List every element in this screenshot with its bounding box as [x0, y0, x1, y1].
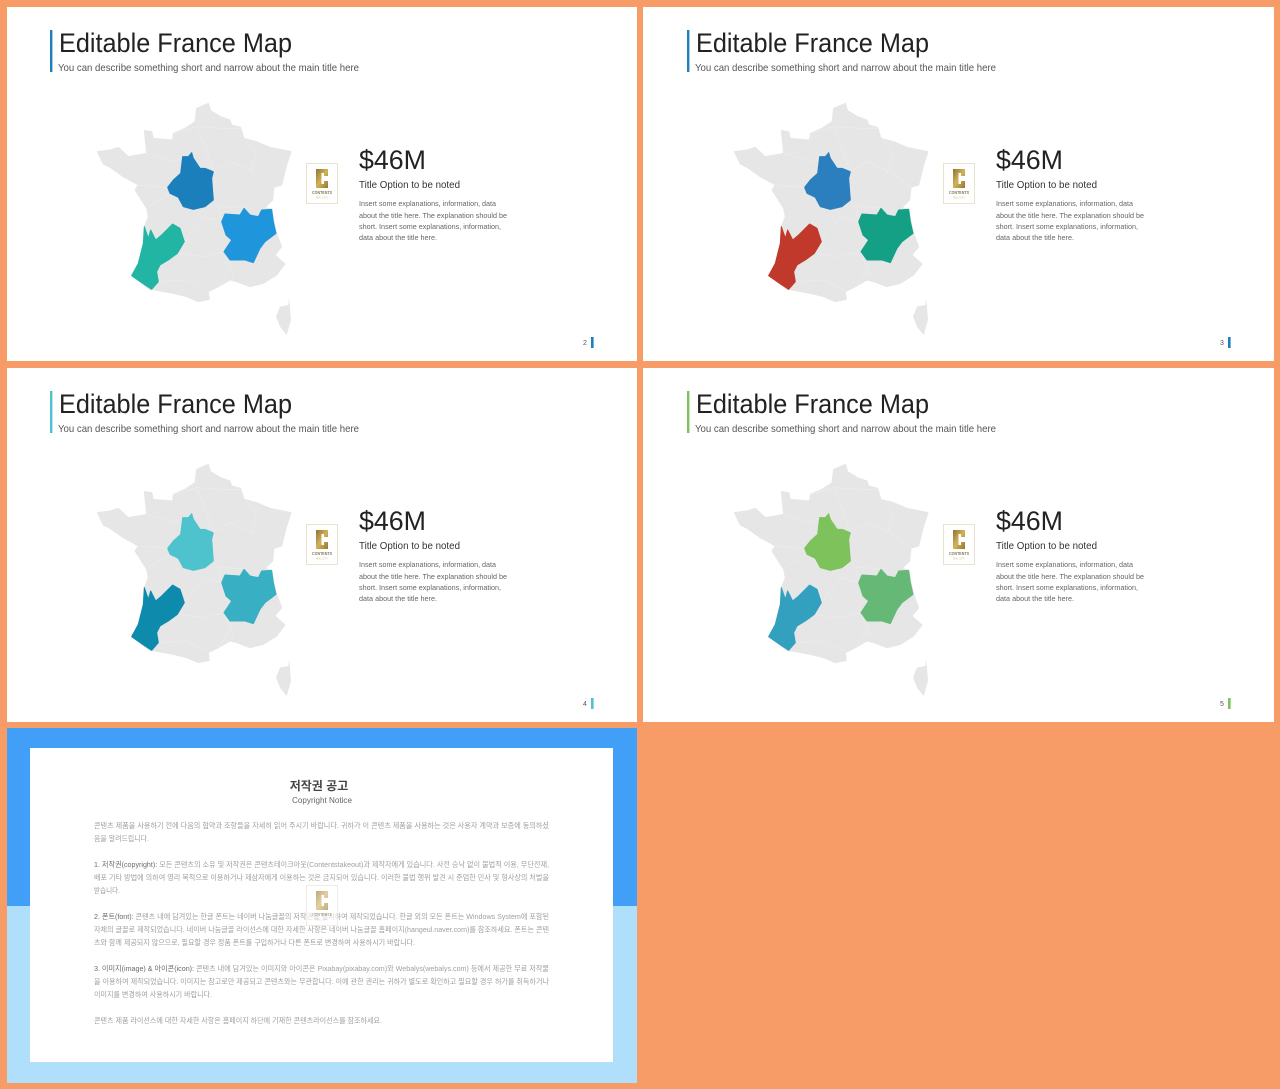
title accent bar	[687, 391, 689, 433]
paragraph: images and icons: 3. 이미지(image) & 아이콘(icon): 콘텐츠 내에 담겨있는 이미지와 아이콘은 Pixabay(pixabay.com)와 Webalys(webalys.com) 등에서 제공한 무료 저작물	[94, 963, 549, 973]
paragraph: images and icons	[94, 963, 549, 999]
closing paragraph: 콘텐츠 제품 라이선스에 대한 자세한 사항은 홈페이지 하단에 기재한 콘텐츠라이선스를 참조하세요.	[94, 1015, 382, 1025]
subtitle: You can describe something short and narrow about the main title here	[58, 62, 359, 74]
text block: figure and explanation: short. Insert some explanations, information,	[359, 222, 501, 231]
paragraph: font: 자체의 글꼴로 제작되었습니다. 네이버 나눔글꼴 라이선스에 대한 자세한 사항은 네이버 나눔글꼴 홈페이지(hangeul.naver.com)를 참조하세요. 폰트는 콘텐	[94, 924, 549, 934]
panel: slide 2	[7, 7, 637, 361]
text block: figure and explanation: short. Insert some explanations, information,	[359, 583, 501, 592]
text block: figure and explanation: data about the title here.	[359, 233, 437, 242]
text block: figure and explanation: Title Option to be noted	[996, 541, 1097, 552]
subtitle: You can describe something short and narrow about the main title here	[58, 423, 359, 435]
paragraph: images and icons: 이미지를 변경하여 사용하시기 바랍니다.	[94, 989, 212, 999]
text block: figure and explanation: about the title here. The explanation should be	[359, 572, 507, 581]
text block: figure and explanation: data about the title here.	[359, 594, 437, 603]
heading: Editable France Map	[696, 28, 929, 58]
panel: slide 3	[643, 7, 1274, 361]
panel: slide 4	[7, 368, 637, 722]
page number	[1220, 698, 1231, 709]
title accent bar	[687, 30, 689, 72]
heading: Editable France Map	[59, 389, 292, 419]
text block: figure and explanation: Title Option to be noted	[359, 541, 460, 552]
text block: figure and explanation	[996, 506, 1144, 603]
text block: figure and explanation: $46M	[359, 145, 426, 175]
paragraph: copyright: 1. 저작권(copyright): 모든 콘텐츠의 소유 및 저작권은 콘텐츠테이크아웃(Contentstakeout)과 제작자에게 있습니다. 사전 승낙 없이 불법적 이용, 무단전재,	[94, 859, 549, 869]
paragraph: copyright	[94, 859, 549, 895]
page number: 4	[583, 701, 587, 708]
intro paragraph: 음을 알려드립니다.	[94, 833, 149, 843]
map of France	[97, 103, 291, 335]
paragraph: font: 츠와 함께 제공되지 않으므로, 필요할 경우 정품 폰트를 구입하거나 다른 폰트로 변경하여 사용하시기 바랍니다.	[94, 937, 415, 947]
paragraph: images and icons: 을 이용하여 제작되었습니다. 이미지는 참고로만 제공되고 콘텐츠와는 무관합니다. 이에 관한 권리는 귀하가 별도로 확인하고 필요할 경우 허가를 취득하거나	[94, 976, 549, 986]
heading: Editable France Map	[696, 389, 929, 419]
page number	[583, 698, 594, 709]
copyright subheading: Copyright Notice	[292, 795, 352, 805]
subtitle: You can describe something short and narrow about the main title here	[695, 423, 996, 435]
paragraph: font: 2. 폰트(font): 콘텐츠 내에 담겨있는 한글 폰트는 네이버 나눔글꼴의 저작권을 명시하여 제작되었습니다. 한글 외의 모든 폰트는 Windows System에 포함된	[94, 911, 549, 921]
icon: logo watermark	[944, 164, 974, 204]
text block: figure and explanation: Insert some explanations, information, data	[996, 199, 1134, 208]
text block: figure and explanation: short. Insert some explanations, information,	[996, 222, 1138, 231]
panel: copyright notice	[7, 728, 637, 1083]
page number	[583, 337, 594, 348]
text block: figure and explanation: Insert some explanations, information, data	[359, 199, 497, 208]
page number: 2	[583, 340, 587, 347]
copyright heading: 저작권 공고	[290, 778, 348, 793]
text block: figure and explanation: Insert some explanations, information, data	[996, 560, 1134, 569]
paragraph: copyright: 배포 기타 방법에 의하여 영리 목적으로 이용하거나 제삼자에게 이용하는 것은 금지되어 있습니다. 이러한 불법 행위 발견 시 준엄한 민사 및 형사상의 처벌을	[94, 872, 549, 882]
subtitle: You can describe something short and narrow about the main title here	[695, 62, 996, 74]
text block: figure and explanation	[996, 145, 1144, 242]
icon: logo watermark	[944, 524, 974, 564]
map of France	[734, 103, 928, 335]
text block: figure and explanation: $46M	[996, 145, 1063, 175]
title accent bar	[50, 391, 52, 433]
icon: logo watermark	[306, 164, 338, 204]
panel: slide 5	[643, 368, 1274, 722]
paragraph: font	[94, 911, 549, 947]
text block: figure and explanation: $46M	[996, 506, 1063, 536]
intro paragraph: 콘텐츠 제품을 사용하기 전에 다음의 협약과 조항들을 자세히 읽어 주시기 바랍니다. 귀하가 이 콘텐츠 제품을 사용하는 것은 사용자 계약과 보증에 동의하셨	[94, 820, 549, 830]
page number: 5	[1220, 701, 1224, 708]
icon: logo watermark	[306, 886, 338, 926]
text block: figure and explanation	[359, 506, 507, 603]
text block: figure and explanation: Title Option to be noted	[996, 180, 1097, 191]
text block: figure and explanation	[359, 145, 507, 242]
paragraph: copyright: 받습니다.	[94, 885, 120, 895]
text block: figure and explanation: Insert some explanations, information, data	[359, 560, 497, 569]
text block: figure and explanation: Title Option to be noted	[359, 180, 460, 191]
map of France	[97, 464, 291, 696]
page number	[1220, 337, 1231, 348]
text block: figure and explanation: data about the title here.	[996, 233, 1074, 242]
text block: figure and explanation: data about the title here.	[996, 594, 1074, 603]
text block: figure and explanation: about the title here. The explanation should be	[359, 211, 507, 220]
intro paragraph	[94, 820, 549, 843]
page number: 3	[1220, 340, 1224, 347]
text block: figure and explanation: short. Insert some explanations, information,	[996, 583, 1138, 592]
heading: Editable France Map	[59, 28, 292, 58]
title accent bar	[50, 30, 52, 72]
icon: logo watermark	[306, 524, 338, 564]
map of France	[734, 464, 928, 696]
text block: figure and explanation: $46M	[359, 506, 426, 536]
text block: figure and explanation: about the title here. The explanation should be	[996, 211, 1144, 220]
text block: figure and explanation: about the title here. The explanation should be	[996, 572, 1144, 581]
